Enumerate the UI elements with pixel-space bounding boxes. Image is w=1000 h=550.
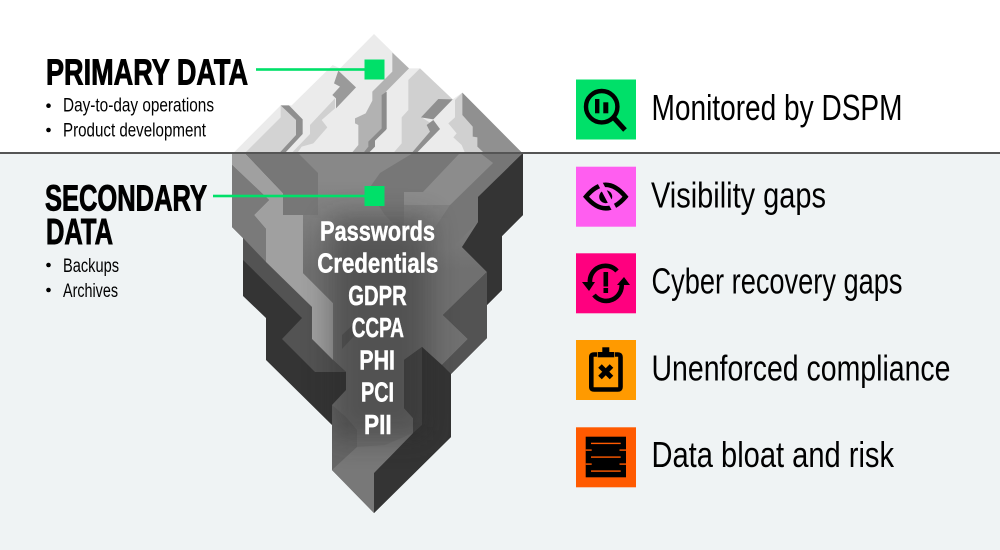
list: primary data uses: Day-to-day operations — [63, 96, 214, 117]
primary marker: connector and square — [256, 60, 384, 80]
iceberg labels: sensitive data types: GDPR — [348, 280, 407, 311]
iceberg labels: sensitive data types: Credentials — [317, 248, 438, 279]
iceberg labels: sensitive data types — [317, 216, 438, 440]
secondary marker: connector and square — [213, 186, 384, 206]
list: primary data uses — [46, 96, 214, 142]
list: primary data uses: Product development — [63, 121, 207, 142]
waterline — [0, 152, 1000, 154]
icon: monitored magnifier — [576, 80, 636, 140]
list: secondary data uses: Backups — [63, 256, 119, 277]
iceberg labels: sensitive data types: Passwords — [320, 216, 435, 247]
heading: secondary data: DATA — [46, 211, 113, 252]
iceberg labels: sensitive data types: PII — [364, 409, 392, 440]
heading: primary data: PRIMARY DATA — [46, 51, 248, 92]
background: sky above waterline — [0, 0, 1000, 152]
legend label: monitored: Monitored by DSPM — [652, 87, 902, 128]
list: secondary data uses — [46, 256, 119, 302]
icon: data bloat stack — [576, 427, 636, 487]
iceberg labels: sensitive data types: CCPA — [352, 312, 404, 343]
icon: cyber recovery arrows — [576, 253, 636, 313]
background: water below waterline — [0, 152, 1000, 550]
icon: compliance clipboard — [576, 340, 636, 400]
list: secondary data uses: Archives — [63, 281, 118, 302]
heading: secondary data: SECONDARY — [45, 178, 207, 219]
legend label: cyber recovery gaps: Cyber recovery gaps — [652, 260, 902, 301]
legend label: data bloat and risk: Data bloat and risk — [652, 434, 895, 475]
legend label: visibility gaps: Visibility gaps — [651, 174, 826, 216]
icon: visibility eye — [576, 167, 636, 227]
heading: secondary data — [45, 178, 207, 252]
iceberg labels: sensitive data types: PCI — [361, 377, 394, 408]
iceberg below water — [232, 153, 523, 513]
iceberg labels: sensitive data types: PHI — [359, 344, 395, 375]
iceberg above water — [233, 34, 522, 153]
